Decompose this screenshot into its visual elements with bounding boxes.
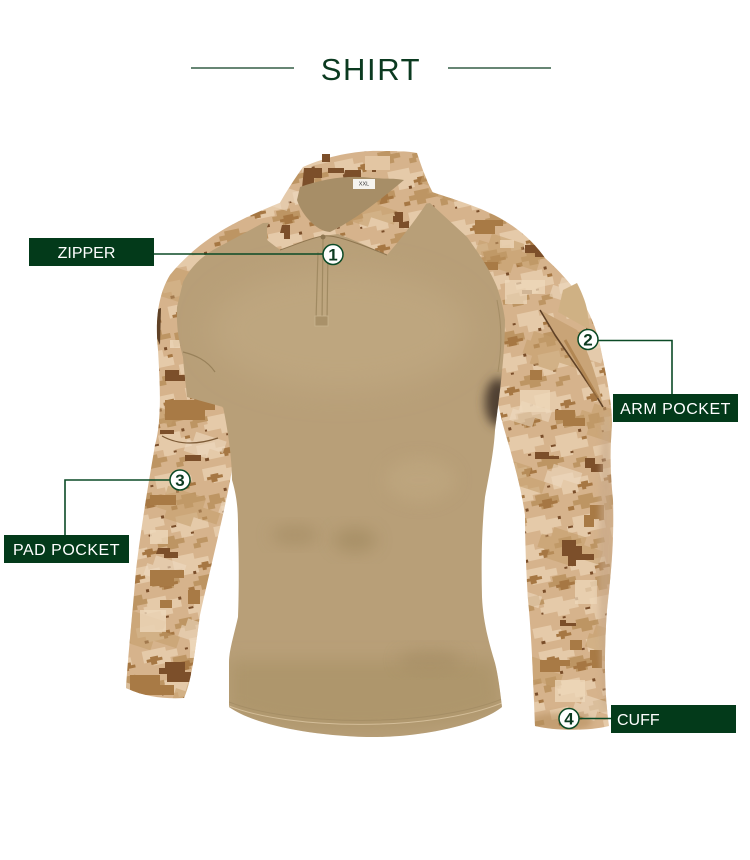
callout 3: pad pocket: PAD POCKET <box>13 542 120 559</box>
callout 2: arm pocket <box>578 330 738 422</box>
callout 3: pad pocket: 3 <box>175 471 185 490</box>
arm velcro patch <box>558 283 590 330</box>
callout 1: zipper <box>29 238 343 266</box>
size tag <box>353 179 375 189</box>
callout 4: cuff: CUFF <box>617 712 660 729</box>
zipper <box>315 234 328 326</box>
callout 4: cuff <box>559 705 736 733</box>
inner collar / neck lining <box>297 177 404 232</box>
callout 3: pad pocket <box>4 470 190 563</box>
callout 2: arm pocket: ARM POCKET <box>620 401 731 418</box>
khaki torso <box>170 190 511 750</box>
title: SHIRT <box>321 52 421 87</box>
callout 1: zipper: ZIPPER <box>58 245 115 262</box>
right sleeve (viewer side) camouflage <box>426 192 614 730</box>
callout 1: zipper: 1 <box>328 246 338 264</box>
callout 2: arm pocket: 2 <box>583 330 593 350</box>
callout 4: cuff: 4 <box>564 710 574 728</box>
collar camouflage <box>267 150 433 256</box>
arm pocket flap <box>540 310 603 407</box>
shirt illustration <box>120 145 620 750</box>
size tag: XXL <box>359 182 369 188</box>
left sleeve (viewer side) camouflage <box>126 202 280 698</box>
